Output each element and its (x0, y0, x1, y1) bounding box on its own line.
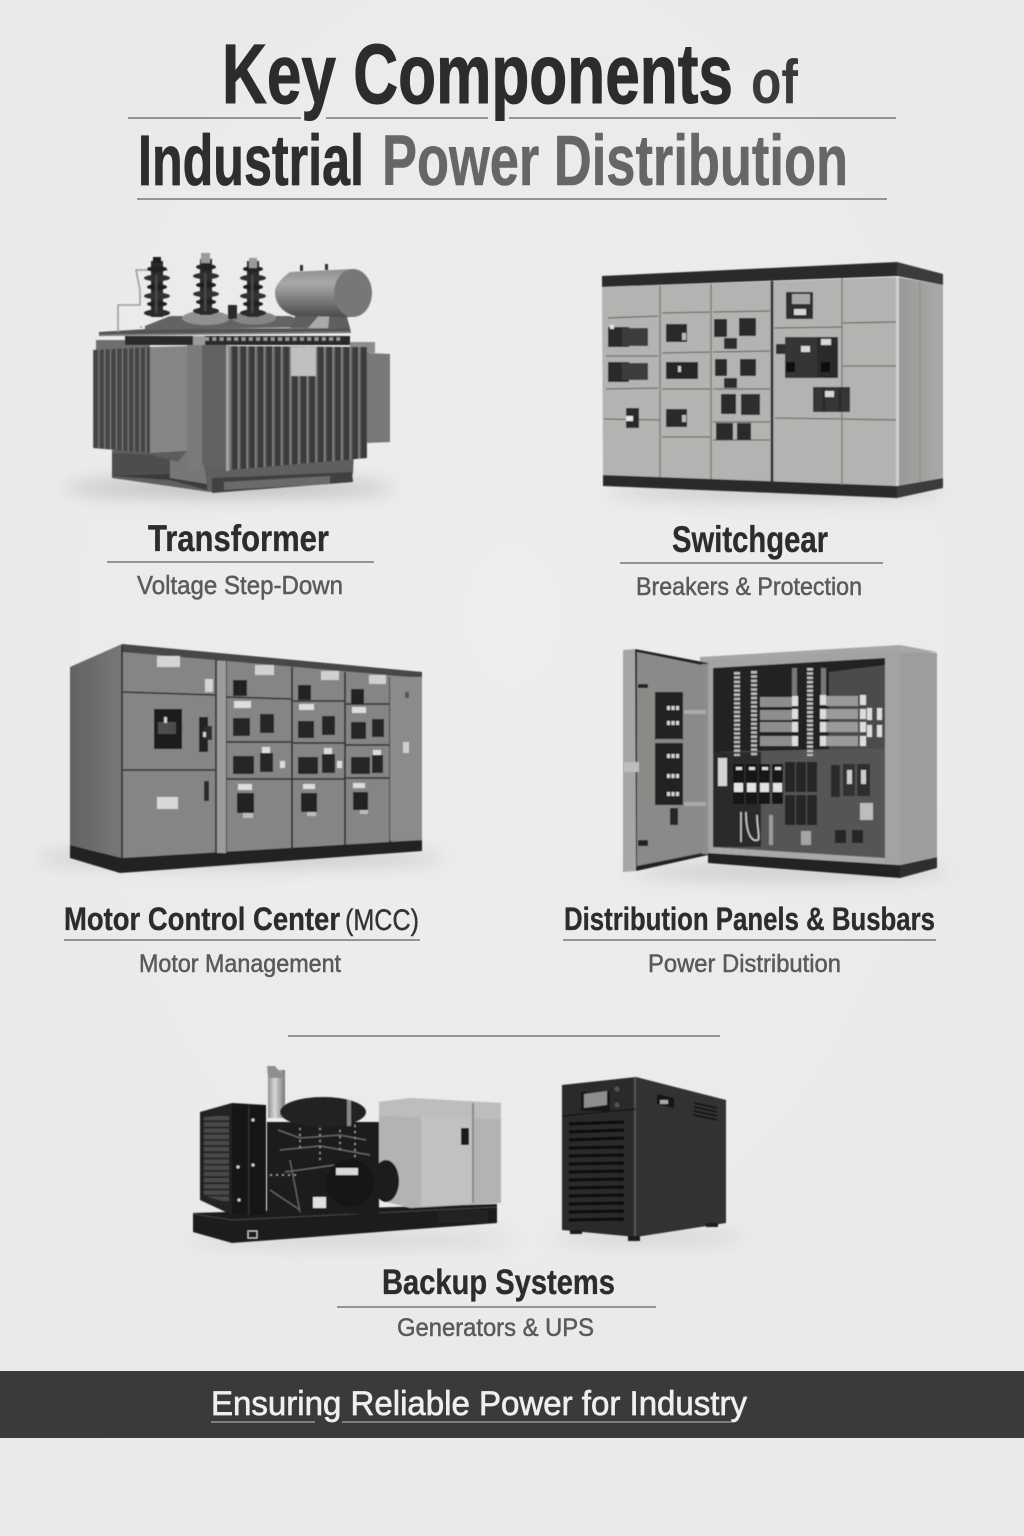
panel: backup systems (190, 1066, 745, 1342)
panel: transformer (65, 253, 395, 600)
heading: distribution panels and busbars: Distribution Panels & Busbars (564, 901, 935, 937)
heading: switchgear: Switchgear (672, 519, 828, 560)
title: Power Distribution (382, 122, 848, 201)
icon: MCC illustration (70, 644, 422, 873)
icon: generator (193, 1066, 501, 1243)
title: Key Components (222, 27, 733, 121)
title (128, 27, 896, 201)
text: MCC subtitle: Motor Management (139, 950, 341, 978)
text: switchgear subtitle: Breakers & Protection (636, 573, 862, 601)
icon: distribution panel illustration (623, 645, 937, 878)
panel: distribution panels and busbars (563, 645, 950, 978)
title: Industrial (138, 122, 364, 201)
footer text: Ensuring Reliable Power for Industry (211, 1385, 747, 1423)
icon: switchgear illustration (602, 262, 943, 498)
heading: transformer: Transformer (148, 518, 329, 559)
text: distribution subtitle: Power Distribution (648, 950, 841, 978)
panel: switchgear (602, 262, 945, 601)
text: backup subtitle: Generators & UPS (397, 1314, 594, 1342)
footer banner (0, 1371, 1024, 1438)
heading: motor control center: (MCC) (345, 904, 419, 937)
icon: UPS (562, 1077, 726, 1241)
panel: motor control center (35, 644, 445, 978)
text: transformer subtitle: Voltage Step-Down (137, 570, 343, 600)
heading: motor control center: Motor Control Center (64, 901, 340, 937)
title: of (751, 48, 798, 117)
heading: backup systems: Backup Systems (382, 1263, 615, 1302)
icon: transformer illustration (93, 253, 390, 493)
